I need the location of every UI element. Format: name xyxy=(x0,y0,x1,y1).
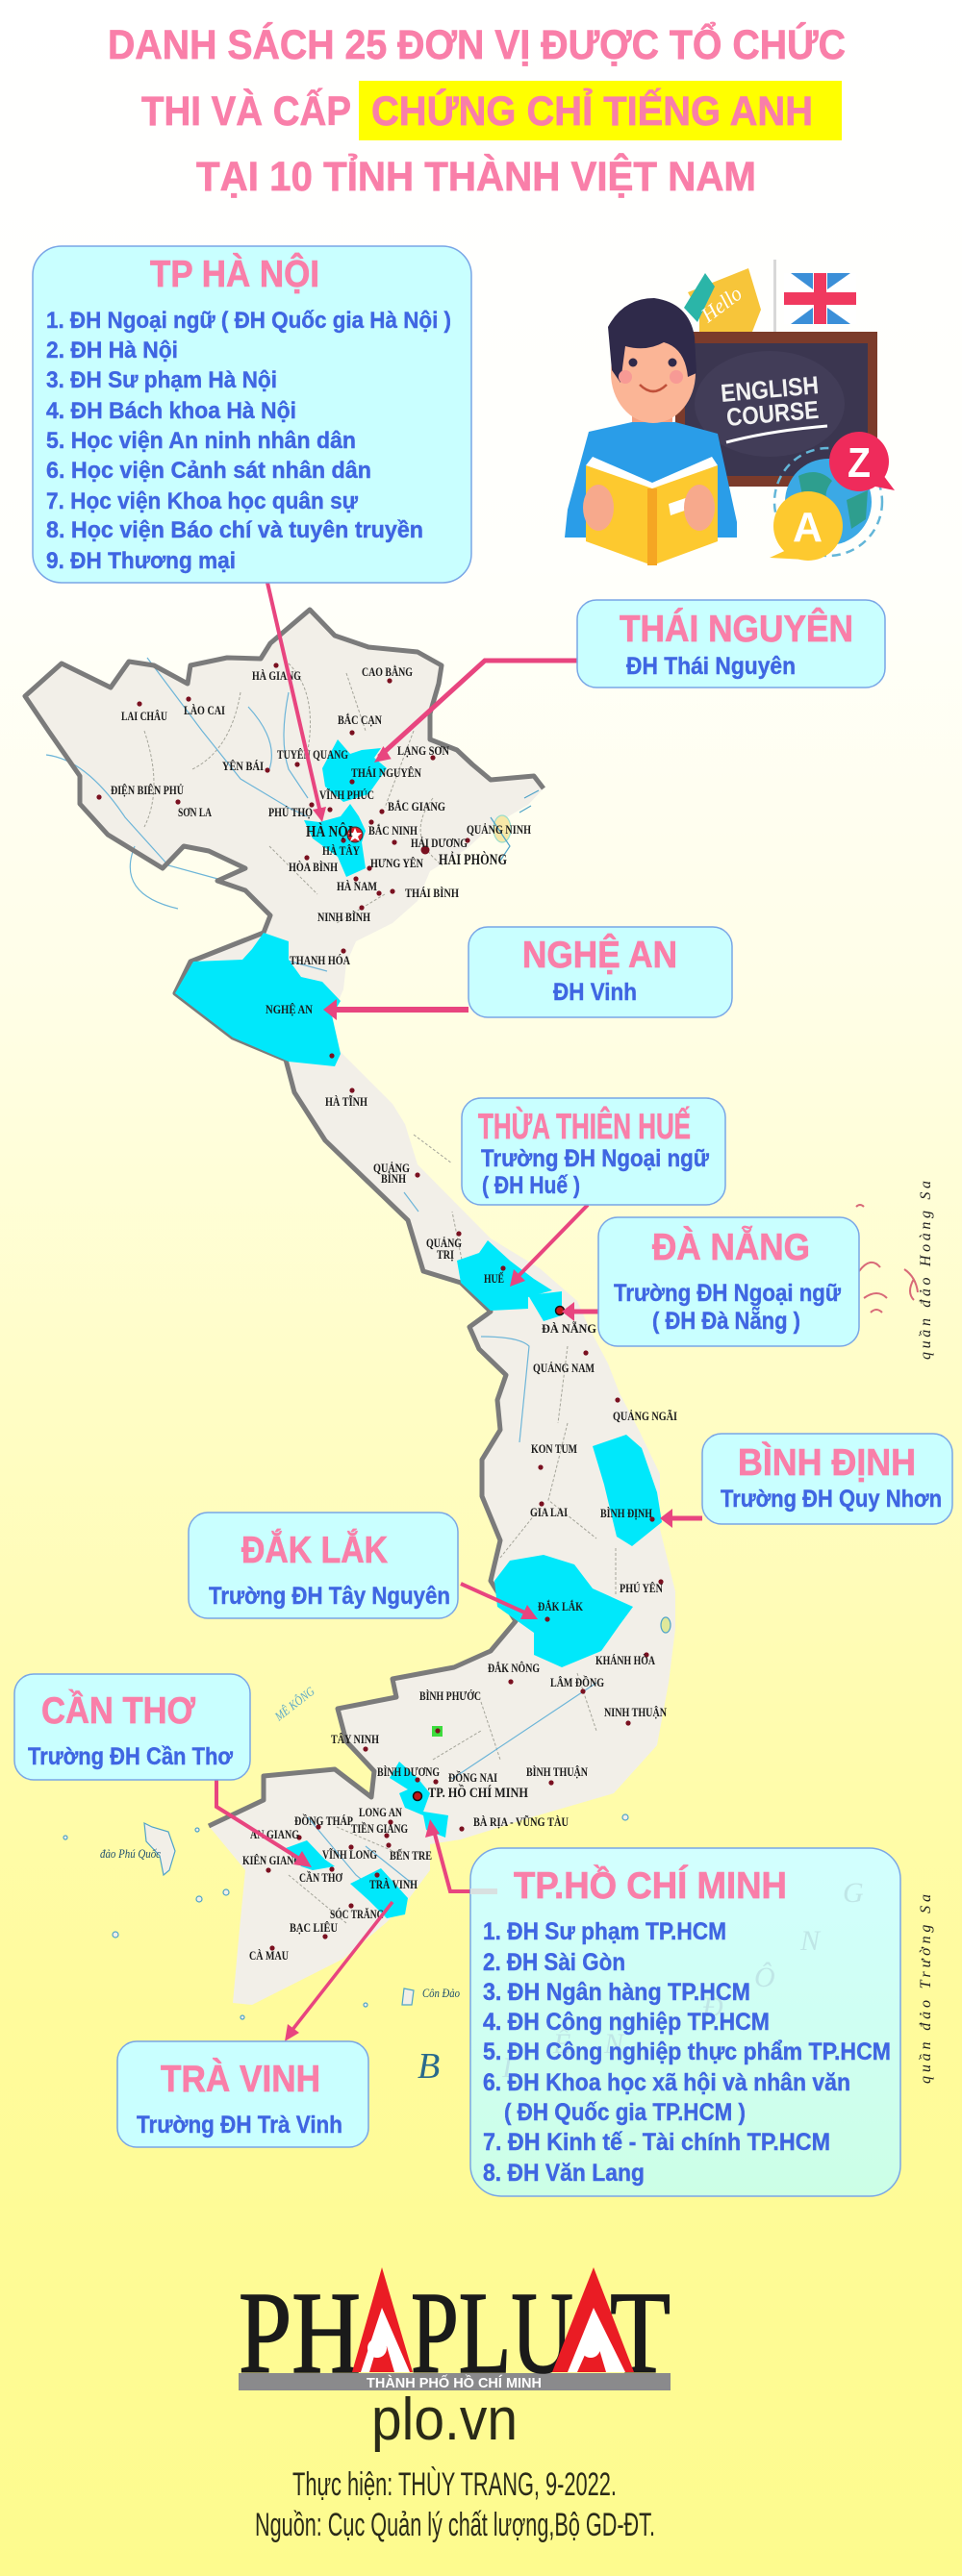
map labels: THÁI BÌNH xyxy=(405,886,459,900)
arrow: Đà Nẵng xyxy=(562,1302,598,1321)
list: Hà Nội units: 8. Học viện Báo chí và tuyên truyền xyxy=(46,517,423,543)
sea name watermark: I xyxy=(501,2052,514,2084)
map labels: NGHỆ AN xyxy=(266,1002,314,1016)
sea name watermark: N xyxy=(799,1925,822,1957)
map labels: BÌNH xyxy=(381,1171,406,1186)
list: Hà Nội units xyxy=(46,308,451,574)
map labels: QUẢNG NAM xyxy=(533,1361,595,1375)
map: province markers xyxy=(96,663,664,1951)
panel: Thừa Thiên Huế: Trường ĐH Ngoại ngữ xyxy=(481,1145,710,1172)
map labels: LAI CHÂU xyxy=(121,709,167,723)
illustration: student with English course board xyxy=(565,260,895,565)
arrow: Bình Định xyxy=(660,1509,702,1528)
list: Hà Nội units: 2. ĐH Hà Nội xyxy=(46,338,178,363)
map labels: TUYÊN QUANG xyxy=(277,747,348,762)
map labels: BÌNH DƯƠNG xyxy=(377,1764,440,1779)
map labels: B xyxy=(418,2046,440,2087)
text: website: plo.vn xyxy=(371,2387,518,2453)
map labels: HÀ NỘI xyxy=(306,822,353,840)
panel: Cần Thơ: Trường ĐH Cần Thơ xyxy=(28,1743,233,1770)
list: Hà Nội units: 6. Học viện Cảnh sát nhân dân xyxy=(46,458,371,484)
list: Hà Nội units: 1. ĐH Ngoại ngữ ( ĐH Quốc gia Hà Nội ) xyxy=(46,308,451,334)
map labels: QUẢNG xyxy=(426,1236,462,1250)
map labels: NINH THUẬN xyxy=(604,1705,667,1719)
map labels: TP. HỒ CHÍ MINH xyxy=(428,1784,528,1801)
panel: Đắk Lắk xyxy=(189,1513,458,1618)
map labels: YÊN BÁI xyxy=(222,759,264,773)
map labels: Côn Đảo xyxy=(422,1986,460,2000)
sea name watermark: Ể xyxy=(552,2028,570,2060)
map labels: BẮC CẠN xyxy=(338,713,382,727)
region: Thái Nguyên xyxy=(322,739,387,802)
list: Hà Nội units: 4. ĐH Bách khoa Hà Nội xyxy=(46,398,296,424)
list: TP.HCM units: ( ĐH Quốc gia TP.HCM ) xyxy=(504,2099,746,2126)
flag xyxy=(773,260,856,333)
region: TP.HCM xyxy=(390,1762,448,1838)
panel: TP.HCM xyxy=(470,1848,900,2196)
logo: Pháp Luật: T xyxy=(610,2268,671,2398)
map labels: ĐÀ NẴNG xyxy=(542,1321,596,1336)
region: Nghệ An xyxy=(175,933,341,1066)
arrow: TP.HCM xyxy=(425,1819,470,1891)
map labels: QUẢNG xyxy=(373,1161,410,1175)
region: Trà Vinh xyxy=(350,1868,408,1918)
map labels: BÌNH PHƯỚC xyxy=(419,1688,481,1703)
arrow: Hà Nội xyxy=(267,583,326,822)
map labels: LÂM ĐỒNG xyxy=(550,1675,604,1689)
list: TP.HCM units: 4. ĐH Công nghiệp TP.HCM xyxy=(483,2009,770,2036)
sea name watermark: N xyxy=(603,2028,625,2060)
panel: Bình Định: BÌNH ĐỊNH xyxy=(738,1441,916,1484)
logo: Pháp Luật xyxy=(239,2267,671,2398)
list: TP.HCM units: 1. ĐH Sư phạm TP.HCM xyxy=(483,1918,726,1945)
map labels: BÀ RỊA - VŨNG TÀU xyxy=(473,1814,569,1829)
map labels: KHÁNH HÒA xyxy=(595,1653,655,1667)
region: Cần Thơ xyxy=(286,1840,335,1870)
map labels: HUẾ xyxy=(484,1271,504,1286)
map labels: CÀ MAU xyxy=(249,1948,289,1963)
map labels: MÊ KÔNG xyxy=(271,1684,317,1724)
map labels: LẠNG SƠN xyxy=(397,743,449,758)
map labels: ĐỒNG NAI xyxy=(448,1770,497,1785)
arrow: Đắk Lắk xyxy=(461,1584,538,1619)
map labels: ĐIỆN BIÊN PHỦ xyxy=(111,783,184,797)
map labels: quần đảo Hoàng Sa xyxy=(918,1181,934,1360)
map labels: VĨNH PHÚC xyxy=(319,788,374,802)
map labels: HÒA BÌNH xyxy=(289,860,338,874)
boy xyxy=(565,298,737,565)
map labels: AN GIANG xyxy=(250,1827,299,1841)
list: TP.HCM units: 2. ĐH Sài Gòn xyxy=(483,1949,625,1976)
globe: A xyxy=(793,504,823,551)
map labels: HẢI DƯƠNG xyxy=(411,836,468,850)
list: Hà Nội units: 7. Học viện Khoa học quân sự xyxy=(46,488,359,514)
map labels: HƯNG YÊN xyxy=(370,856,423,870)
region: Bình Định xyxy=(593,1435,662,1546)
map labels: THANH HÓA xyxy=(290,953,350,967)
map labels: ĐẮK NÔNG xyxy=(488,1661,540,1675)
region: Hà Nội xyxy=(304,804,366,877)
map labels: NINH BÌNH xyxy=(317,910,370,924)
arrow: Nghệ An xyxy=(323,999,468,1020)
list: TP.HCM units xyxy=(483,1918,891,2187)
map labels: LONG AN xyxy=(359,1805,402,1819)
panel: Nghệ An: ĐH Vinh xyxy=(553,979,637,1006)
panel: Cần Thơ: CẦN THƠ xyxy=(41,1689,196,1732)
map labels: KON TUM xyxy=(531,1441,577,1456)
map labels: QUẢNG NINH xyxy=(467,822,531,837)
panel: Đà Nẵng: Trường ĐH Ngoại ngữ xyxy=(614,1280,842,1307)
map labels: TRÀ VINH xyxy=(369,1877,418,1891)
logo: Pháp Luật: PLU xyxy=(411,2268,573,2398)
map labels: PHÚ YÊN xyxy=(620,1581,663,1595)
map labels: SƠN LA xyxy=(178,805,212,819)
panel: Nghệ An xyxy=(468,927,732,1017)
title: THI VÀ CẤP xyxy=(141,88,351,135)
map labels: BẾN TRE xyxy=(390,1848,432,1863)
sea name watermark: Ô xyxy=(754,1962,775,1993)
map labels: BÌNH ĐỊNH xyxy=(600,1506,652,1520)
map labels: HÀ TÂY xyxy=(322,843,360,858)
map of Vietnam xyxy=(25,610,918,2019)
panel: Đà Nẵng xyxy=(598,1217,859,1346)
map labels: BẮC NINH xyxy=(368,823,418,838)
map labels: quần đảo Trường Sa xyxy=(918,1894,934,2084)
sea name watermark: Đ xyxy=(701,1991,723,2023)
text: source: Nguồn: Cục Quản lý chất lượng,Bộ GD-ĐT. xyxy=(255,2507,655,2543)
panel: Trà Vinh: Trường ĐH Trà Vinh xyxy=(137,2112,342,2138)
map labels: THÁI NGUYÊN xyxy=(351,765,421,780)
arrow: Cần Thơ xyxy=(216,1780,312,1867)
hello note: Hello xyxy=(696,281,747,328)
text: credit: Thực hiện: THÙY TRANG, 9-2022. xyxy=(292,2466,617,2503)
title: DANH SÁCH 25 ĐƠN VỊ ĐƯỢC TỔ CHỨC xyxy=(108,20,846,68)
map labels: ĐỒNG THÁP xyxy=(294,1813,353,1828)
panel: Thái Nguyên xyxy=(577,600,885,688)
map: western border xyxy=(25,610,544,1826)
map labels: SÓC TRĂNG xyxy=(330,1907,384,1921)
arrow: Trà Vinh xyxy=(285,1902,392,2041)
list: TP.HCM units: 5. ĐH Công nghiệp thực phẩm TP.HCM xyxy=(483,2038,891,2065)
list: Hà Nội units: 9. ĐH Thương mại xyxy=(46,548,236,574)
blackboard: ENGLISH xyxy=(720,370,820,408)
panel: Thừa Thiên Huế: THỪA THIÊN HUẾ xyxy=(478,1106,691,1146)
list: TP.HCM units: 8. ĐH Văn Lang xyxy=(483,2160,645,2187)
panel: Đắk Lắk: ĐẮK LẮK xyxy=(241,1529,388,1571)
panel: TP Hà Nội xyxy=(33,246,471,583)
map labels: BẠC LIÊU xyxy=(290,1920,338,1935)
title: CHỨNG CHỈ TIẾNG ANH xyxy=(371,88,813,135)
panel: Thừa Thiên Huế xyxy=(462,1098,725,1205)
map labels: TIỀN GIANG xyxy=(351,1821,408,1836)
map labels: VĨNH LONG xyxy=(322,1847,377,1862)
logo: Pháp Luật: THÀNH PHỐ HỒ CHÍ MINH xyxy=(367,2374,542,2391)
region: Đà Nẵng xyxy=(528,1291,562,1321)
panel: Trà Vinh: TRÀ VINH xyxy=(161,2058,320,2100)
map labels: TÂY NINH xyxy=(331,1732,379,1746)
map labels: CAO BẰNG xyxy=(362,664,413,679)
panel: Đà Nẵng: ĐÀ NẴNG xyxy=(652,1226,810,1268)
heading: TP.HCM: TP.HỒ CHÍ MINH xyxy=(514,1864,787,1907)
map labels: CẦN THƠ xyxy=(299,1870,343,1885)
panel: Đắk Lắk: Trường ĐH Tây Nguyên xyxy=(209,1583,450,1610)
list: Hà Nội units: 3. ĐH Sư phạm Hà Nội xyxy=(46,367,277,393)
hello note xyxy=(684,268,761,332)
sea name watermark: G xyxy=(843,1877,864,1909)
map: islands xyxy=(63,790,671,2019)
panel: Nghệ An: NGHỆ AN xyxy=(522,934,677,976)
map labels xyxy=(100,664,934,2087)
region: Đắk Lắk xyxy=(494,1555,633,1667)
list: TP.HCM units: 3. ĐH Ngân hàng TP.HCM xyxy=(483,1979,750,2006)
panel: Thái Nguyên: ĐH Thái Nguyên xyxy=(626,653,796,680)
map labels: ĐẮK LẮK xyxy=(538,1599,584,1613)
globe: Z xyxy=(848,439,871,487)
region: Thừa Thiên Huế xyxy=(457,1240,552,1311)
sea name watermark xyxy=(501,1877,864,2084)
map labels: GIA LAI xyxy=(530,1505,568,1519)
map labels: HÀ TĨNH xyxy=(325,1094,367,1109)
panel: Bình Định xyxy=(702,1434,952,1524)
panel: Thái Nguyên: THÁI NGUYÊN xyxy=(620,608,853,650)
map labels: TRỊ xyxy=(437,1247,454,1262)
map labels: PHÚ THỌ xyxy=(268,805,313,819)
list: TP.HCM units: 6. ĐH Khoa học xã hội và nhân văn xyxy=(483,2069,850,2096)
map labels: BẮC GIANG xyxy=(388,799,445,813)
panel: Cần Thơ xyxy=(14,1674,250,1780)
map labels: HẢI PHÒNG xyxy=(439,850,507,868)
title xyxy=(108,20,846,200)
map labels: QUẢNG NGÃI xyxy=(613,1409,677,1423)
map labels: BÌNH THUẬN xyxy=(526,1764,588,1779)
arrow: Thái Nguyên xyxy=(374,661,577,764)
logo: Pháp Luật: PH xyxy=(239,2268,361,2398)
heading: TP Hà Nội: TP HÀ NỘI xyxy=(150,252,319,295)
panel: Trà Vinh xyxy=(117,2041,368,2147)
globe xyxy=(770,432,895,561)
list: Hà Nội units: 5. Học viện An ninh nhân dân xyxy=(46,428,356,454)
title: TẠI 10 TỈNH THÀNH VIỆT NAM xyxy=(196,153,756,200)
islands: Hoàng Sa xyxy=(856,1205,918,1313)
list: TP.HCM units: 7. ĐH Kinh tế - Tài chính TP.HCM xyxy=(483,2129,830,2156)
map labels: HÀ GIANG xyxy=(252,668,301,683)
map labels: KIÊN GIANG xyxy=(242,1853,301,1867)
panel: Thừa Thiên Huế: ( ĐH Huế ) xyxy=(482,1172,580,1199)
arrow: Huế xyxy=(510,1205,588,1287)
arrows xyxy=(216,583,702,2041)
map labels: LÀO CAI xyxy=(184,703,225,717)
map labels: đảo Phú Quốc xyxy=(100,1846,161,1861)
map labels: HÀ NAM xyxy=(337,879,377,893)
map: land xyxy=(25,610,675,2005)
blackboard: COURSE xyxy=(725,395,820,432)
panel: Đà Nẵng: ( ĐH Đà Nẵng ) xyxy=(652,1306,800,1335)
blackboard xyxy=(675,332,877,487)
